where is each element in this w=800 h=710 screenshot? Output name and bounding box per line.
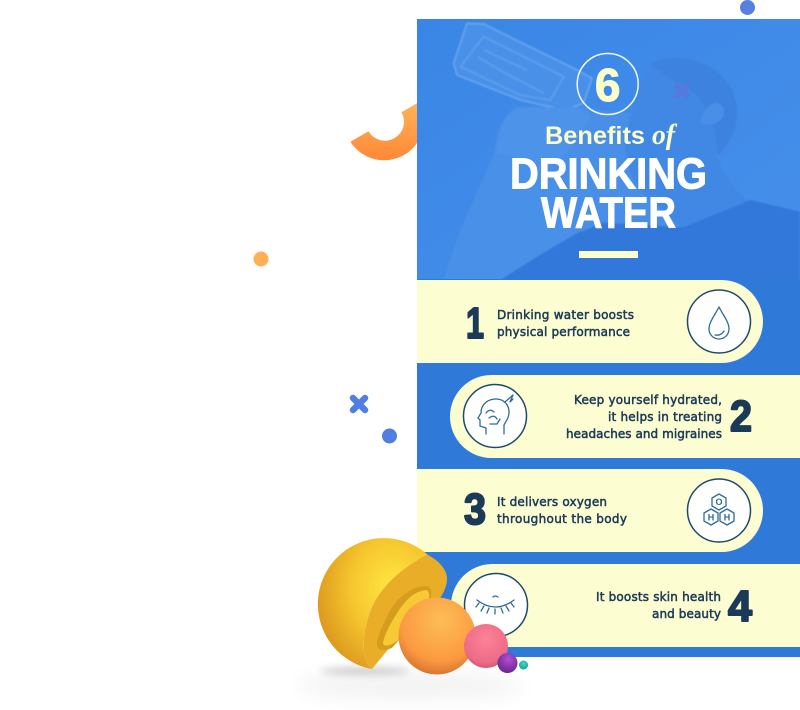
number 4: 4	[728, 582, 753, 631]
decorative orange half ring	[350, 102, 424, 160]
ground shadow	[295, 668, 525, 699]
icon: H2O molecule: H	[708, 512, 714, 522]
number 1: 1	[466, 299, 484, 348]
number 6 in circle: 6	[595, 59, 620, 111]
3D spheres cluster	[295, 538, 528, 699]
icon: water drop	[688, 290, 750, 353]
number 3: 3	[464, 485, 486, 534]
text: benefit 3: throughout the body	[497, 512, 627, 526]
pill: benefit 2	[450, 375, 800, 458]
title block	[510, 54, 707, 258]
heading: Benefits of: Benefits	[545, 122, 645, 150]
text: benefit 1: physical performance	[497, 325, 630, 339]
icon: H2O molecule: O	[715, 497, 723, 507]
purple sphere	[498, 653, 518, 673]
heading: DRINKING: DRINKING	[510, 150, 707, 198]
icon: head with migraine	[464, 384, 526, 448]
text: benefit 1: Drinking water boosts	[497, 308, 634, 322]
pink sphere	[464, 624, 508, 668]
title underline bar	[579, 251, 638, 258]
heading: Benefits of	[545, 119, 678, 151]
header photo: man drinking from bottle	[417, 19, 800, 280]
text: benefit 4: It boosts skin health	[596, 590, 721, 604]
decorative orange dot	[254, 252, 268, 266]
text: benefit 4: and beauty	[652, 607, 721, 621]
text: benefit 3: It delivers oxygen	[497, 495, 607, 509]
faded cross over photo	[677, 86, 687, 96]
heading: WATER: WATER	[541, 188, 676, 238]
decorative blue cross	[353, 398, 365, 410]
panel: infographic card	[417, 19, 800, 657]
icon: closed eye	[464, 574, 528, 636]
decorative blue dot	[382, 428, 397, 444]
yellow cut sphere	[318, 538, 447, 669]
decorative top blue dot	[740, 0, 755, 15]
text: benefit 2: it helps in treating	[608, 410, 722, 424]
number 6 in circle	[577, 54, 638, 114]
pill: benefit 1	[417, 280, 763, 363]
orange sphere	[398, 598, 476, 674]
pill: benefit 3	[417, 469, 763, 552]
teal sphere	[519, 660, 528, 670]
number 2: 2	[730, 392, 752, 441]
text: benefit 2: Keep yourself hydrated,	[574, 393, 722, 407]
icon: H2O molecule: H	[724, 512, 730, 522]
heading: Benefits of: of	[652, 119, 678, 151]
text: benefit 2: headaches and migraines	[566, 427, 722, 441]
pill: benefit 4	[451, 564, 800, 647]
icon: H2O molecule	[688, 479, 750, 542]
